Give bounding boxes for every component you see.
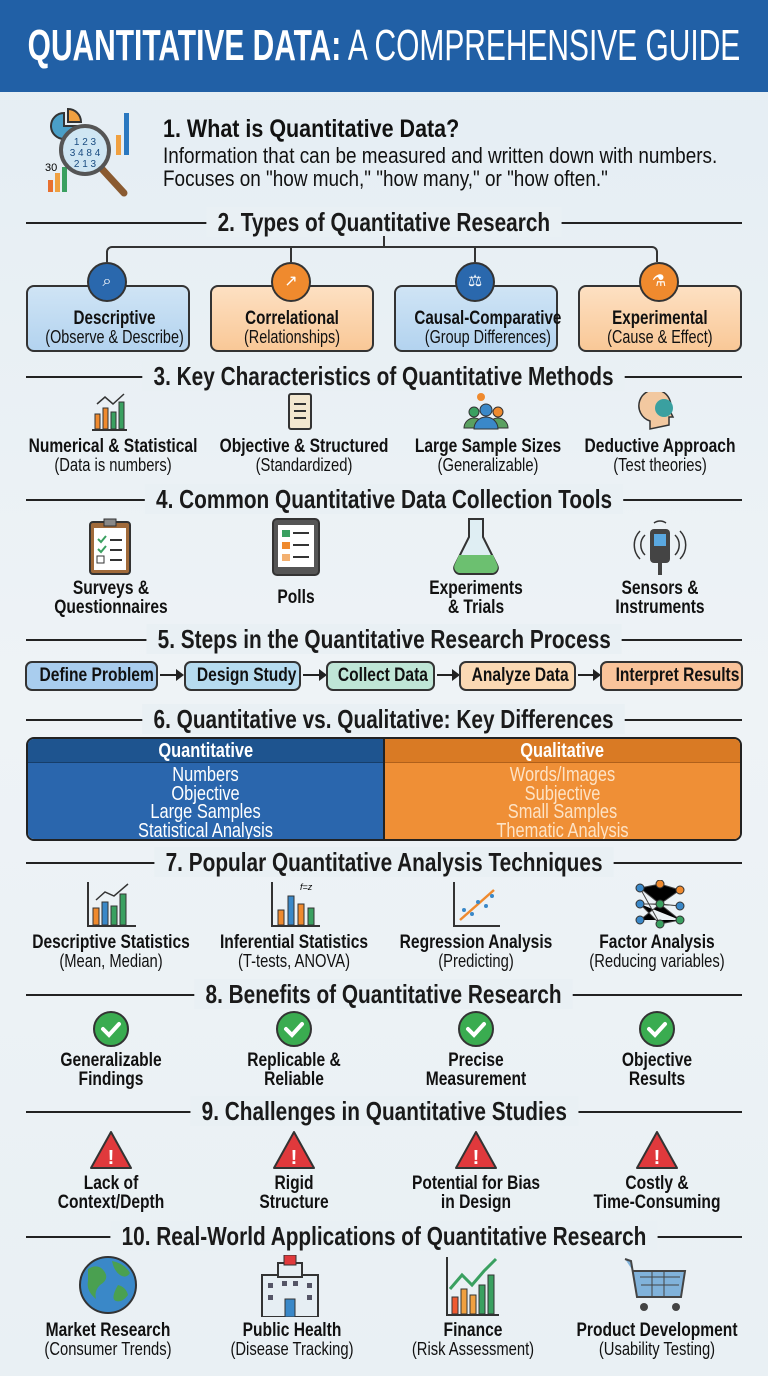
item: numerical: Numerical & Statistical: [29, 436, 197, 457]
comparison table: Numbers: [172, 764, 239, 786]
item: objective results: Objective: [622, 1050, 692, 1071]
icons row 10: [79, 1255, 686, 1317]
item: surveys: Surveys &: [73, 578, 149, 599]
item: bias: [412, 1173, 540, 1213]
section 1 text: [163, 115, 717, 191]
item: descriptive stats: Descriptive Statistics: [32, 932, 190, 953]
item: regression: Regression Analysis: [400, 932, 552, 953]
comparison table: [26, 737, 742, 841]
item: market research: Market Research: [46, 1320, 170, 1341]
icon: magnifier over data: 30: [45, 162, 57, 174]
item: objective results: Results: [629, 1069, 685, 1090]
panel: experimental: (Cause & Effect): [607, 327, 713, 347]
item: replicable: Reliable: [264, 1069, 324, 1090]
item: polls: Polls: [277, 587, 315, 608]
heading 10: 10. Real-World Applications of Quantitative Research: [122, 1221, 646, 1251]
item: numerical: [29, 436, 197, 475]
item: surveys: Questionnaires: [54, 597, 168, 618]
item: deductive: [585, 436, 735, 475]
item: public health: (Disease Tracking): [230, 1339, 354, 1359]
item: objective results: [622, 1050, 692, 1090]
comparison table: Quantitative: [158, 740, 253, 762]
panel: descriptive: [26, 285, 190, 352]
item: large samples: [415, 436, 561, 475]
check icons: [93, 1011, 675, 1047]
warning icons: !: [473, 1147, 479, 1169]
heading 8: 8. Benefits of Quantitative Research: [206, 979, 562, 1009]
icon: magnifier over data: 2 1 3: [74, 159, 97, 170]
icons row 4: [89, 518, 686, 576]
heading 7: 7. Popular Quantitative Analysis Techniques: [166, 847, 602, 877]
icon: magnifier over data: 3 4 8 4: [70, 148, 101, 159]
item: replicable: Replicable &: [247, 1050, 341, 1071]
item: deductive: (Test theories): [613, 455, 707, 475]
item: costly: [594, 1173, 720, 1213]
item: sensors: Sensors &: [621, 578, 699, 599]
item: generalizable: Generalizable: [60, 1050, 162, 1071]
comparison table: Words/Images: [510, 764, 615, 786]
panel: correlational: (Relationships): [244, 327, 340, 347]
heading 2: 2. Types of Quantitative Research: [218, 207, 550, 237]
icons row 3: [92, 392, 674, 431]
warning icons: [90, 1131, 678, 1169]
item: surveys: [54, 578, 168, 618]
item: bias: in Design: [441, 1192, 511, 1213]
item: large samples: Large Sample Sizes: [415, 436, 561, 457]
item: lack of context: Context/Depth: [58, 1192, 164, 1213]
item: costly: Time-Consuming: [594, 1192, 720, 1213]
item: generalizable: Findings: [79, 1069, 143, 1090]
icons row 7: [87, 880, 684, 928]
item: regression: (Predicting): [438, 951, 514, 971]
item: experiments: & Trials: [448, 597, 504, 618]
panel: causal-comparative: Causal-Comparative: [414, 308, 561, 329]
icons row 7: f=z: [300, 882, 313, 892]
section 1 text: 1. What is Quantitative Data?: [163, 115, 459, 143]
item: objective: [220, 436, 388, 475]
section 1 text: Information that can be measured and written down with numbers.: [163, 143, 717, 168]
item: descriptive stats: [32, 932, 190, 971]
item: factor analysis: (Reducing variables): [589, 951, 725, 971]
warning icons: !: [108, 1147, 114, 1169]
item: factor analysis: Factor Analysis: [599, 932, 715, 953]
icon: magnifier over data: [45, 108, 129, 196]
item: finance: Finance: [444, 1320, 502, 1341]
icon circles: ⚗: [652, 273, 666, 290]
icon circles: [87, 262, 679, 302]
comparison table: Large Samples: [150, 801, 261, 823]
item: market research: [44, 1320, 172, 1359]
item: experiments: [429, 578, 523, 618]
item: precise: [426, 1050, 526, 1090]
process steps: Analyze Data: [472, 665, 569, 686]
item: sensors: Instruments: [615, 597, 705, 618]
panel: descriptive: Descriptive: [74, 308, 156, 329]
item: finance: [412, 1320, 534, 1359]
header banner: [0, 0, 768, 92]
item: sensors: [615, 578, 705, 618]
item: deductive: Deductive Approach: [585, 436, 735, 457]
tree connector: [106, 236, 658, 262]
icon circles: ⚖: [468, 273, 482, 290]
process steps: [25, 661, 743, 691]
item: objective: (Standardized): [256, 455, 352, 475]
process steps: Collect Data: [338, 665, 428, 686]
warning icons: !: [291, 1147, 297, 1169]
warning icons: !: [654, 1147, 660, 1169]
icon: magnifier over data: 1 2 3: [74, 137, 97, 148]
comparison table: Qualitative: [521, 740, 604, 762]
icon circles: ↗: [284, 273, 298, 290]
comparison table: Thematic Analysis: [496, 820, 629, 841]
comparison table: Small Samples: [508, 801, 617, 823]
item: regression: [400, 932, 552, 971]
panel: causal-comparative: [394, 285, 558, 352]
item: inferential stats: [220, 932, 368, 971]
heading 5: 5. Steps in the Quantitative Research Process: [157, 624, 611, 654]
heading 6: 6. Quantitative vs. Qualitative: Key Differences: [154, 704, 614, 734]
item: replicable: [247, 1050, 341, 1090]
item: costly: Costly &: [625, 1173, 689, 1194]
item: inferential stats: (T-tests, ANOVA): [238, 951, 350, 971]
header banner: QUANTITATIVE DATA: A COMPREHENSIVE GUIDE: [28, 21, 740, 70]
process steps: Define Problem: [40, 665, 154, 686]
item: rigid: Rigid: [275, 1173, 313, 1194]
heading 4: 4. Common Quantitative Data Collection Tools: [156, 484, 612, 514]
heading 3: 3. Key Characteristics of Quantitative Methods: [154, 361, 614, 391]
item: public health: Public Health: [243, 1320, 341, 1341]
item: market research: (Consumer Trends): [44, 1339, 172, 1359]
item: product development: Product Development: [576, 1320, 738, 1341]
panel: experimental: [578, 285, 742, 352]
panel: causal-comparative: (Group Differences): [425, 327, 551, 347]
section 1 text: Focuses on "how much," "how many," or "how often.": [163, 166, 608, 191]
process steps: Design Study: [197, 665, 296, 686]
item: product development: (Usability Testing): [599, 1339, 715, 1359]
item: rigid: [259, 1173, 329, 1213]
item: factor analysis: [589, 932, 725, 971]
comparison table: Statistical Analysis: [138, 820, 273, 841]
item: experiments: Experiments: [429, 578, 523, 599]
icon circles: ⌕: [103, 273, 111, 290]
item: precise: Precise: [448, 1050, 504, 1071]
panel: descriptive: (Observe & Describe): [45, 327, 184, 347]
item: precise: Measurement: [426, 1069, 526, 1090]
item: inferential stats: Inferential Statistics: [220, 932, 368, 953]
item: lack of context: Lack of: [84, 1173, 138, 1194]
item: generalizable: [60, 1050, 162, 1090]
heading 9: 9. Challenges in Quantitative Studies: [201, 1096, 567, 1126]
panel: experimental: Experimental: [612, 308, 708, 329]
panel: correlational: Correlational: [245, 308, 339, 329]
item: descriptive stats: (Mean, Median): [59, 951, 163, 971]
item: numerical: (Data is numbers): [54, 455, 172, 475]
item: objective: Objective & Structured: [220, 436, 388, 457]
item: lack of context: [58, 1173, 164, 1213]
panel: correlational: [210, 285, 374, 352]
item: product development: [576, 1320, 738, 1359]
item: large samples: (Generalizable): [438, 455, 538, 475]
comparison table: Objective: [171, 782, 240, 804]
item: bias: Potential for Bias: [412, 1173, 540, 1194]
item: rigid: Structure: [259, 1192, 329, 1213]
process steps: Interpret Results: [616, 665, 739, 686]
item: public health: [230, 1320, 354, 1359]
item: finance: (Risk Assessment): [412, 1339, 534, 1359]
comparison table: Subjective: [525, 782, 600, 804]
